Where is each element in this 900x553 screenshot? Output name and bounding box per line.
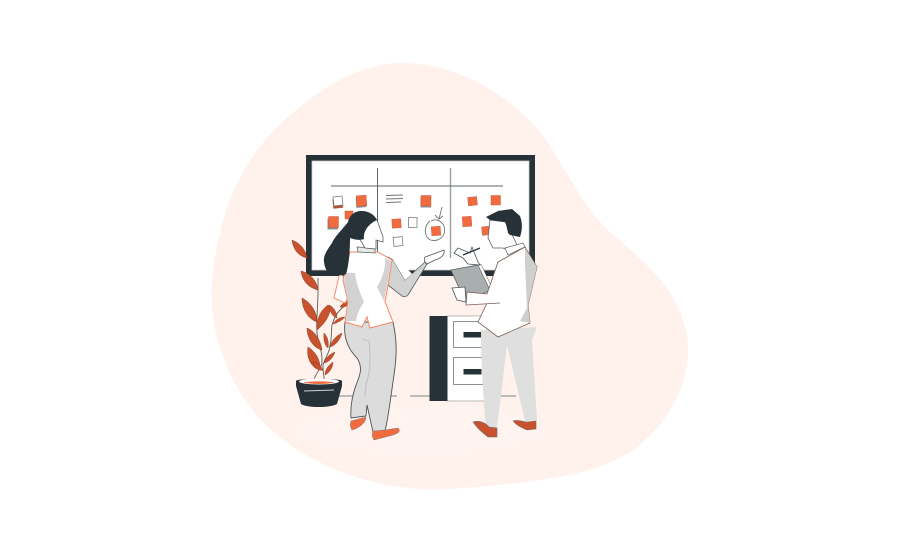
text lines on board	[386, 195, 403, 202]
plant leaves	[292, 240, 352, 375]
man	[451, 209, 537, 437]
woman trousers	[345, 322, 396, 432]
board surface	[312, 161, 529, 270]
pot	[296, 379, 342, 407]
man hair	[486, 209, 522, 237]
woman hair	[324, 211, 377, 275]
circle and arrow annotation	[425, 207, 445, 241]
book	[451, 265, 490, 303]
woman arm	[388, 257, 427, 297]
sticky notes	[328, 195, 500, 246]
drawer handles	[464, 332, 482, 338]
cabinet side	[430, 316, 448, 401]
pot rim detail	[299, 378, 339, 384]
board frame	[306, 155, 535, 276]
man trousers	[481, 327, 537, 428]
man face	[488, 220, 517, 249]
man forearm	[466, 263, 502, 305]
floor line	[338, 395, 516, 397]
man upper hand and pen	[454, 247, 480, 265]
note colours	[328, 195, 500, 246]
board column lines	[331, 168, 503, 260]
woman left sleeve	[334, 272, 352, 303]
note shadows	[328, 197, 431, 230]
cabinet body	[447, 316, 497, 401]
man forearm edges	[466, 262, 500, 305]
background blob	[212, 63, 688, 489]
woman jacket	[343, 252, 393, 328]
woman face	[358, 215, 383, 249]
woman collar	[357, 247, 375, 253]
man jacket	[478, 247, 537, 337]
woman	[324, 211, 444, 440]
man shoes	[473, 421, 497, 437]
man collar	[505, 243, 525, 255]
woman jacket shadows	[344, 273, 364, 321]
board	[306, 155, 535, 276]
woman hand	[424, 250, 444, 264]
floor shadow	[290, 403, 550, 457]
plant stems	[313, 278, 350, 382]
drawers	[454, 322, 494, 348]
woman shoes	[350, 417, 366, 430]
filing cabinet	[430, 316, 497, 401]
plant	[292, 240, 352, 407]
man lower hand	[452, 287, 466, 302]
man jacket shadow	[520, 248, 537, 323]
